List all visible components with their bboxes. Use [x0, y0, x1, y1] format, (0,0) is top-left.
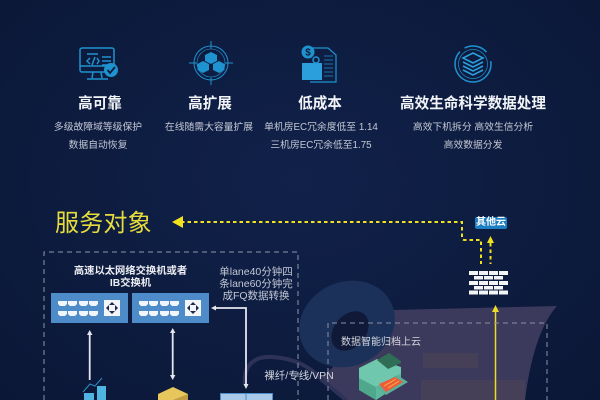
icon: sequencer [220, 393, 273, 400]
arrow: dotted yellow up to 其他云 [487, 236, 494, 264]
text: 生命科学 description: 高效数据分发 [444, 140, 502, 151]
text: 高扩展 description: 在线随需大容量扩展 [165, 122, 253, 133]
text: 低成本 description: 三机房EC冗余低至1.75 [270, 140, 372, 151]
icon: expansion target with cubes [189, 41, 233, 85]
text: switch title: 高速以太网络交换机或者 [74, 266, 187, 277]
heading: 低成本: 低成本 [298, 96, 342, 112]
panel: on-premise dashed box [44, 252, 298, 400]
background ghost machinery [242, 280, 557, 400]
text: switch title [74, 264, 187, 289]
text: 低成本 description [264, 122, 378, 151]
heading: 高可靠: 高可靠 [78, 96, 122, 112]
icon: monitor with check [79, 47, 118, 80]
text: 高可靠 description [54, 122, 142, 151]
icon: cost document with wallet [302, 46, 337, 83]
text: switch title: IB交换机 [110, 278, 151, 289]
icon: bar chart server [82, 378, 106, 400]
badge: 其他云: 其他云 [476, 217, 506, 228]
text: 低成本 description: 单机房EC冗余度低至 1.14 [264, 122, 378, 133]
text: conversion time note: 单lane40分钟四 [219, 266, 293, 278]
text: conversion time note: 成FQ数据转换 [222, 290, 290, 302]
icon: archive machine [359, 353, 408, 400]
text: 生命科学 description: 高效下机拆分 高效生信分析 [413, 122, 533, 133]
panel: cloud archive dashed box [328, 322, 548, 400]
text: 生命科学 description [413, 122, 533, 151]
icon: firewall bricks [469, 271, 508, 294]
icon: switch right [132, 293, 209, 323]
text: 高可靠 description: 数据自动恢复 [69, 140, 127, 151]
text: conversion time note [219, 266, 293, 302]
heading: 服务对象: 服务对象 [55, 210, 152, 237]
text: conversion time note: 条lane60分钟完 [219, 278, 293, 290]
arrow: storage to switch bidirectional [170, 328, 176, 380]
text: link types: 裸纤/专线/VPN [264, 370, 334, 382]
icon: data layers in ring [454, 45, 492, 83]
text: cloud archive label: 数据智能归档上云 [341, 337, 421, 348]
arrow: sequencer to switch elbow [211, 306, 248, 389]
text: 高可靠 description: 多级故障域等级保护 [54, 122, 142, 133]
icon: cost document with wallet: $ [305, 48, 311, 58]
arrow: left server up to switch [87, 330, 92, 380]
icon: yellow storage cube [158, 387, 188, 400]
icon: switch left [51, 293, 128, 323]
arrow: solid yellow up to firewall [492, 305, 499, 400]
heading: 高效生命科学数据处理: 高效生命科学数据处理 [400, 96, 546, 112]
heading: 高扩展: 高扩展 [188, 96, 232, 112]
arrow: dotted yellow to 服务对象 [172, 216, 482, 264]
